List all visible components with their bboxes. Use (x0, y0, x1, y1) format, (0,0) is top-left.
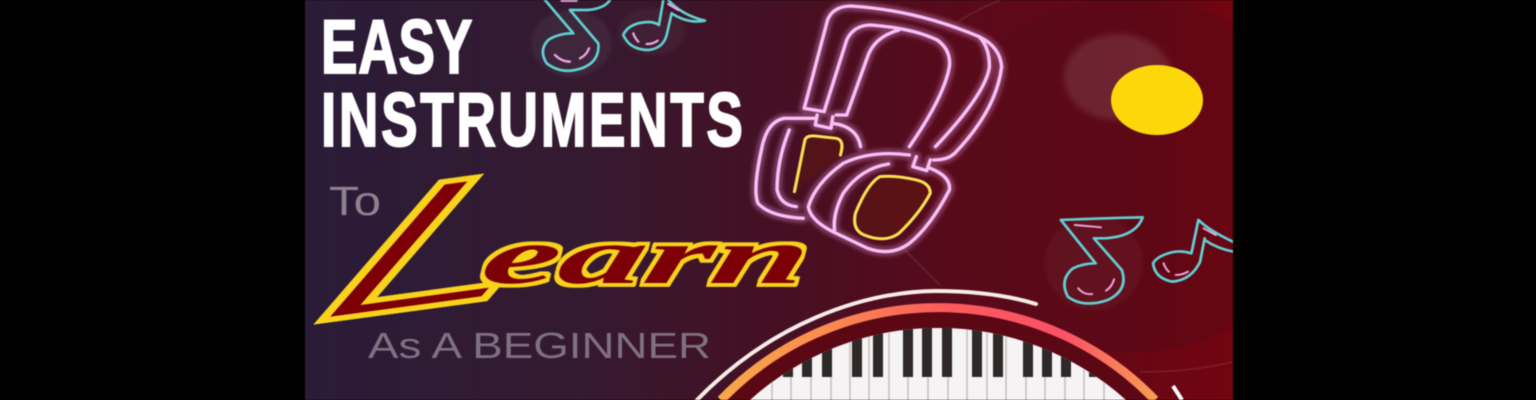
script word: Learn: L (254, 114, 655, 368)
decorative yellow circle (1064, 34, 1203, 135)
icon: top music notes (532, 0, 705, 77)
script word: Learn: earn (474, 212, 821, 301)
icon: neon headphones (756, 6, 1002, 252)
subtitle: As A BEGINNER: As A BEGINNER (368, 325, 711, 366)
icon: right music notes (1048, 215, 1234, 308)
subtitle: To: To (329, 178, 381, 224)
white tick (1173, 386, 1182, 400)
piano keys (750, 328, 1126, 400)
title: EASY INSTRUMENTS: INSTRUMENTS (321, 78, 743, 163)
title: EASY INSTRUMENTS: EASY (321, 5, 472, 90)
piano circle (697, 291, 1182, 400)
gradient ring (721, 308, 1155, 400)
white arc (697, 291, 1036, 400)
title: EASY INSTRUMENTS (321, 5, 743, 163)
background panel (305, 0, 1330, 400)
